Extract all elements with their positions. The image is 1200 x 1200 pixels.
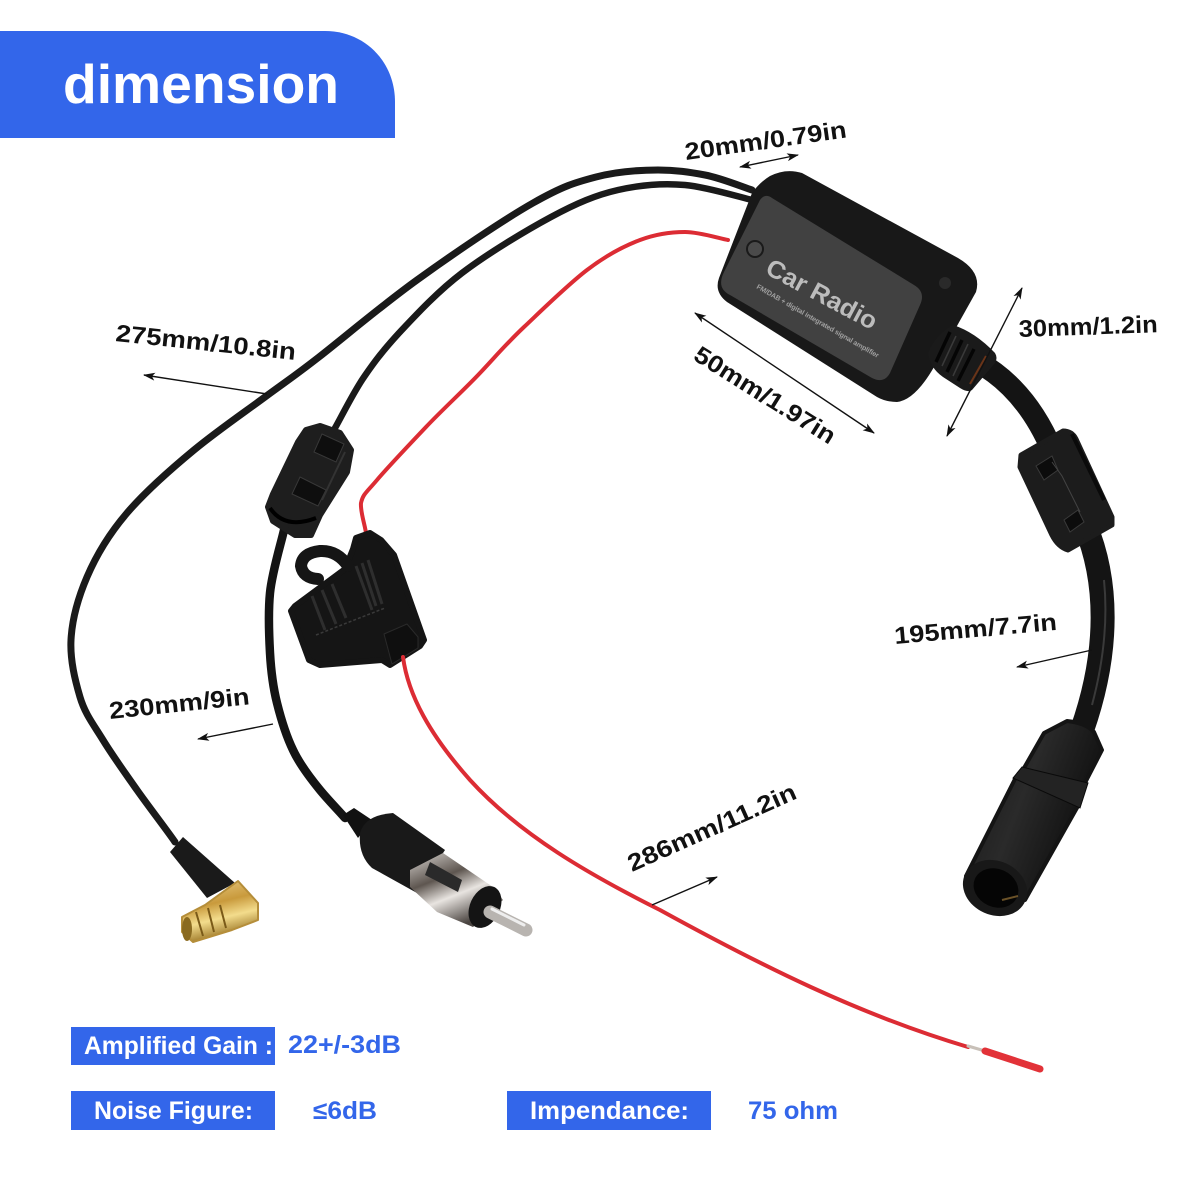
spec: noise figure xyxy=(71,1091,377,1130)
title banner: dimension xyxy=(63,53,339,115)
SMB connector xyxy=(170,837,258,942)
spec: impedance: Impendance: xyxy=(530,1097,689,1125)
amplifier module xyxy=(718,171,977,402)
cable: red power wire lower xyxy=(403,657,1040,1069)
cable: main coax xyxy=(978,362,1106,730)
ferrite: right xyxy=(1020,431,1112,550)
label: 30mm: 30mm/1.2in xyxy=(1018,311,1158,343)
spec: noise figure: Noise Figure: xyxy=(94,1097,253,1125)
label: 195mm: 195mm/7.7in xyxy=(893,609,1058,650)
LED xyxy=(747,241,763,257)
label: 286mm: 286mm/11.2in xyxy=(623,779,801,877)
fuse clip hook xyxy=(301,551,348,579)
spec: noise figure: ≤6dB xyxy=(313,1097,377,1125)
cable: FM aerial lead xyxy=(269,184,752,818)
socket opening xyxy=(954,850,1036,926)
module label: Car Radio xyxy=(761,254,882,336)
spec: impedance: 75 ohm xyxy=(748,1097,838,1125)
strain relief xyxy=(928,325,996,391)
cable: DAB lead xyxy=(71,170,752,842)
label: 275mm: 275mm/10.8in xyxy=(114,320,297,366)
aerial plug xyxy=(343,808,526,933)
module small print: FM/DAB + digital integrated signal amplifier xyxy=(755,284,880,360)
spec: impedance xyxy=(507,1091,838,1130)
spec: amplified gain: 22+/-3dB xyxy=(288,1031,401,1059)
module top face xyxy=(721,196,922,380)
label: 20mm: 20mm/0.79in xyxy=(683,117,848,166)
label: 50mm: 50mm/1.97in xyxy=(689,341,841,450)
dimension arrows xyxy=(144,155,1092,905)
cable: red power wire upper xyxy=(361,232,728,534)
spec: amplified gain: Amplified Gain : xyxy=(84,1032,273,1060)
barrel socket xyxy=(954,721,1102,926)
label: 230mm: 230mm/9in xyxy=(108,683,251,725)
fuse holder xyxy=(291,533,424,665)
spec: amplified gain xyxy=(71,1027,401,1065)
ferrite: left xyxy=(268,426,351,535)
title banner xyxy=(0,31,395,138)
